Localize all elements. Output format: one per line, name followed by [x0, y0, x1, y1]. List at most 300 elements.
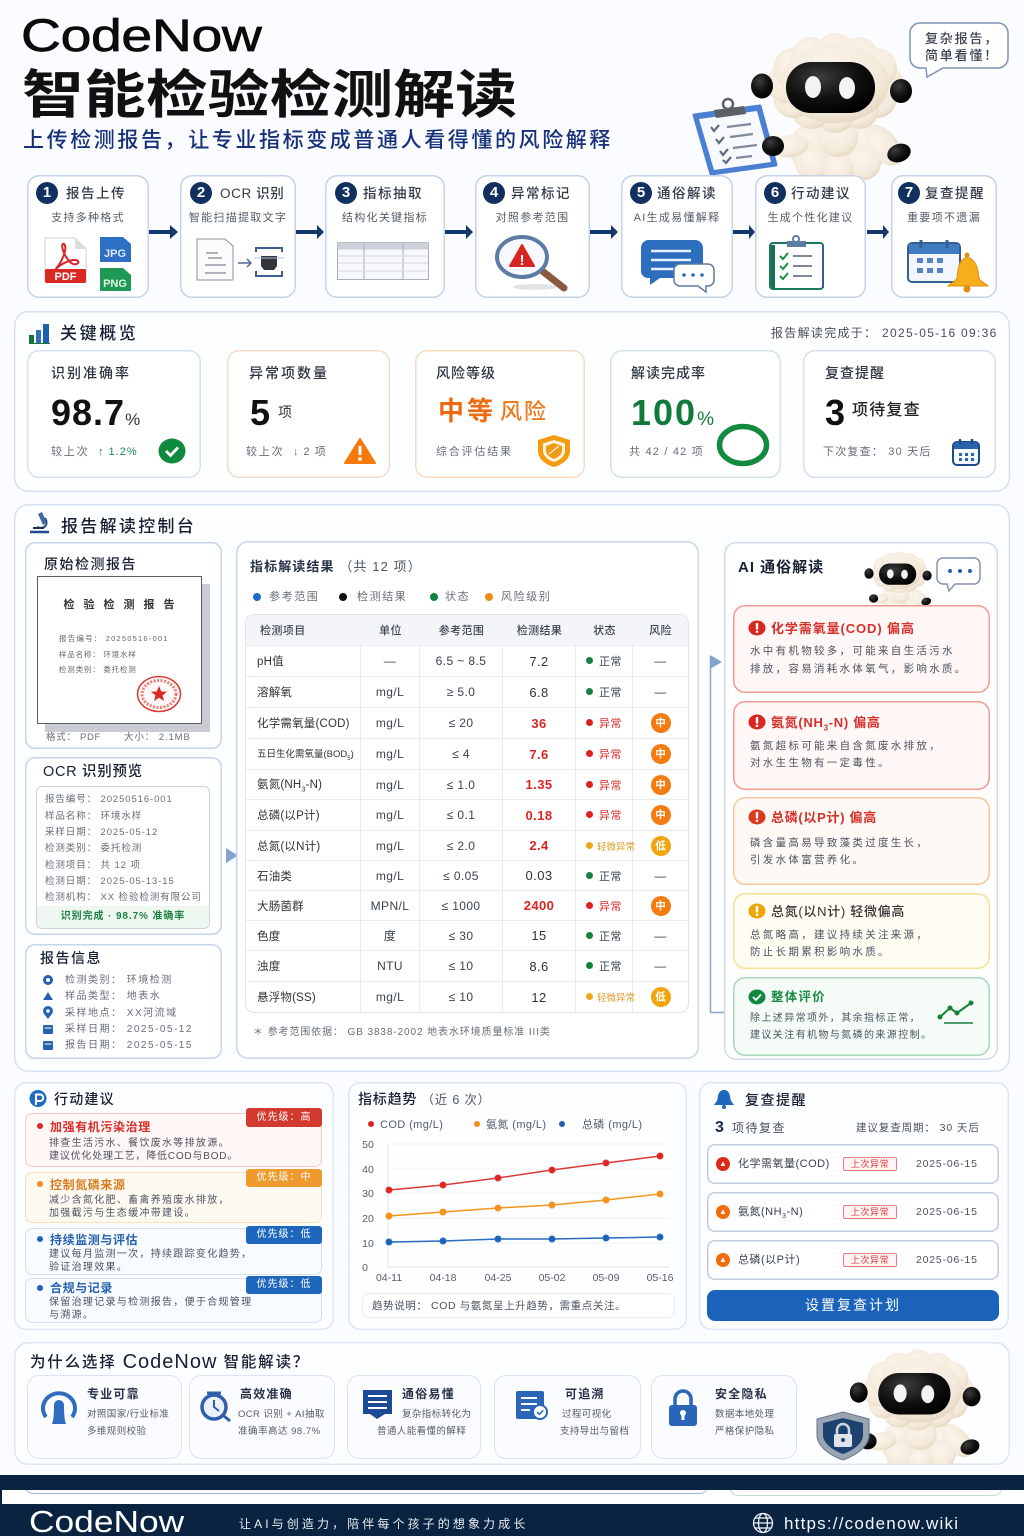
- card: review reminder: [803, 350, 996, 478]
- subtitle: 上传检测报告，让专业指标变成普通人看得懂的风险解释: [23, 129, 613, 152]
- row: phosphorus: 上次异常: [851, 1255, 889, 1265]
- bubble text: 复杂报告，: [925, 31, 999, 46]
- indicator table: 6.5 ~ 8.5: [436, 654, 486, 668]
- step 7: 重要项不遗漏: [907, 212, 981, 224]
- document preview: 样品名称： 环境水样: [59, 650, 137, 659]
- indicator table: 正常: [599, 961, 622, 973]
- action: monitoring: [25, 1228, 322, 1275]
- action: organic pollution: [25, 1113, 322, 1167]
- icon: file formats: [44, 237, 131, 291]
- website: https://codenow.wiki: [784, 1514, 959, 1533]
- indicator table: 7.6: [529, 746, 549, 762]
- callout: COD: 水中有机物较多，可能来自生活污水: [750, 645, 955, 657]
- priority tag: 优先级：低: [256, 1279, 312, 1290]
- feature: reliable: 多维规则校验: [87, 1426, 146, 1437]
- indicator table: 异常: [599, 749, 622, 761]
- step 6: 行动建议: [791, 186, 851, 201]
- feature: reliable: 对照国家/行业标准: [87, 1409, 169, 1420]
- row: ammonia: ▲: [719, 1207, 727, 1216]
- indicator table: [246, 615, 688, 1012]
- feature: plain language: 复杂指标转化为: [402, 1409, 471, 1420]
- footer logo: CodeNow: [29, 1504, 184, 1539]
- line chart: 05-09: [593, 1272, 620, 1284]
- action: compliance: 与溯源。: [49, 1310, 94, 1321]
- icon: file formats: PNG: [103, 278, 127, 290]
- mascot: small: [864, 552, 932, 605]
- card: accuracy: 较上次: [51, 446, 89, 458]
- review cycle: 建议复查周期： 30 天后: [856, 1122, 980, 1134]
- indicator table: ≤ 30: [449, 928, 473, 942]
- step 1: 1: [43, 184, 51, 201]
- heading: 指标趋势 （近 6 次）: [358, 1091, 491, 1107]
- card: review reminder: 3: [825, 392, 846, 433]
- callout: ammonia: 对水生生物有一定毒性。: [750, 757, 891, 769]
- indicator table: 中: [655, 778, 666, 790]
- feature: plain language: 普通人能看懂的解释: [377, 1426, 466, 1437]
- arrow: report to results: [226, 848, 236, 863]
- heading: 关键概览: [60, 324, 138, 343]
- indicator table: 0.18: [526, 808, 552, 822]
- action: compliance: [25, 1278, 322, 1323]
- chart legend: [368, 1117, 642, 1131]
- priority tag: [246, 1226, 322, 1244]
- title: 智能检验检测解读: [22, 67, 517, 125]
- callout: phosphorus: 引发水体富营养化。: [750, 854, 865, 866]
- step 7: [891, 175, 997, 298]
- icon: padlock: [667, 1389, 699, 1429]
- icon: alert: [748, 904, 766, 918]
- OCR text box: 报告编号： 20250516-001: [45, 794, 173, 805]
- card: report info: [25, 944, 222, 1059]
- step 6: 6: [771, 184, 779, 201]
- feature: reliable: [27, 1375, 182, 1459]
- progress ring: [716, 424, 770, 466]
- indicator table: MPN/L: [371, 898, 409, 912]
- feature: traceable: 可追溯: [565, 1387, 605, 1401]
- callout: nitrogen: [733, 893, 990, 969]
- icon: shield: [538, 435, 570, 467]
- icon: bell: [714, 1090, 734, 1109]
- row: phosphorus: 2025-06-15: [916, 1254, 978, 1266]
- step 5: 5: [637, 184, 645, 201]
- priority tag: 优先级：低: [256, 1229, 312, 1240]
- document preview: [37, 576, 202, 724]
- action: nitrogen phosphorus: 加强截污与生态缓冲带建设。: [49, 1208, 196, 1219]
- indicator table: 状态: [593, 625, 616, 637]
- feature: privacy: 数据本地处理: [715, 1409, 774, 1420]
- step 7: 7: [905, 184, 913, 201]
- icon: alert: [748, 620, 766, 636]
- step 5: AI生成易懂解释: [634, 212, 720, 224]
- legend: 参考范围: [269, 591, 319, 603]
- line chart: 30: [362, 1188, 374, 1200]
- indicator table: mg/L: [376, 685, 404, 699]
- feature: plain language: [347, 1375, 481, 1459]
- card title: 指标解读结果 （共 12 项）: [250, 559, 422, 574]
- heading: 为什么选择 CodeNow 智能解读？: [30, 1351, 310, 1373]
- priority tag: [246, 1276, 322, 1294]
- card: review reminder: 下次复查： 30 天后: [823, 446, 932, 458]
- heading: 行动建议: [54, 1091, 115, 1107]
- step 2: 智能扫描提取文字: [189, 212, 287, 224]
- icon: warning triangle: [344, 438, 376, 464]
- indicator table: 正常: [599, 687, 622, 699]
- icon: checklist clipboard: [769, 235, 824, 290]
- card: accuracy: ↑ 1.2%: [98, 446, 138, 458]
- step 1: 支持多种格式: [51, 212, 125, 224]
- indicator table: 0.03: [526, 868, 552, 883]
- callout: ammonia: 氨氮(NH3-N) 偏高: [771, 715, 881, 733]
- card: completion: 解读完成率: [631, 365, 706, 381]
- indicator table: 中: [655, 809, 666, 821]
- indicator table: 1.35: [526, 777, 552, 792]
- callout: phosphorus: [733, 797, 990, 885]
- card: anomalies: 异常项数量: [249, 365, 329, 381]
- indicator table: mg/L: [376, 990, 404, 1004]
- indicator table: 2400: [524, 898, 554, 913]
- row: COD: 上次异常: [851, 1159, 889, 1169]
- feature: traceable: 过程可视化: [562, 1409, 612, 1420]
- callout: COD: 化学需氧量(COD) 偏高: [771, 621, 915, 636]
- indicator table: 石油类: [257, 870, 292, 882]
- step 6: [755, 175, 866, 298]
- indicator table: ≤ 1.0: [447, 778, 475, 792]
- indicator table: 悬浮物(SS): [257, 992, 316, 1004]
- callout: overall: [733, 977, 990, 1056]
- line chart: 04-18: [430, 1272, 457, 1284]
- action: compliance: 合规与记录: [50, 1281, 113, 1295]
- callout: nitrogen: 总氮(以N计) 轻微偏高: [771, 904, 905, 919]
- card: report info: 采样地点： XX河流域: [65, 1008, 178, 1019]
- icon: chat bubbles: [641, 240, 715, 294]
- card: risk level: 风险: [500, 399, 548, 424]
- row: ammonia: 2025-06-15: [916, 1206, 978, 1218]
- series: phosphorus: [386, 1234, 663, 1245]
- icon: document lines: [361, 1389, 395, 1423]
- chart legend: 氨氮 (mg/L): [486, 1117, 546, 1131]
- indicator table: 中: [655, 900, 666, 912]
- feature: plain language: 通俗易懂: [402, 1387, 455, 1401]
- info icons: [43, 975, 53, 1050]
- priority tag: 优先级：中: [256, 1172, 312, 1183]
- action: organic pollution: 建议优化处理工艺，降低COD与BOD。: [49, 1151, 238, 1162]
- step 4: [475, 175, 590, 298]
- heading: 报告解读控制台: [61, 517, 196, 536]
- action: monitoring: 验证治理效果。: [49, 1262, 128, 1273]
- callout: overall: 除上述异常项外，其余指标正常，: [750, 1013, 921, 1024]
- action: monitoring: 持续监测与评估: [50, 1233, 138, 1247]
- feature: efficient: OCR 识别 + AI抽取: [238, 1409, 325, 1420]
- card: anomalies: ↓ 2 项: [293, 446, 327, 458]
- tagline: 让AI与创造力，陪伴每个孩子的想象力成长: [239, 1517, 528, 1531]
- action: organic pollution: 加强有机污染治理: [50, 1120, 151, 1134]
- trend note: [362, 1293, 675, 1318]
- indicator table: 低: [655, 840, 666, 852]
- process steps: [27, 175, 997, 298]
- indicator table: 总氮(以N计): [257, 840, 320, 852]
- indicator table: —: [654, 654, 667, 668]
- icon: magnifier with warning: !: [520, 252, 524, 269]
- card: original report: [25, 542, 222, 749]
- indicator table: 15: [531, 928, 547, 943]
- indicator table: —: [384, 654, 396, 668]
- row: phosphorus: 总磷(以P计): [738, 1254, 800, 1266]
- card: anomalies: [227, 350, 390, 478]
- indicator table: 溶解氧: [257, 687, 292, 699]
- icon: microscope: [30, 512, 49, 534]
- card: risk level: 中等: [438, 396, 496, 426]
- step 7: 复查提醒: [925, 186, 985, 201]
- pending count: 3: [715, 1119, 724, 1136]
- icon: OCR scan: [196, 238, 284, 280]
- speech bubble: [909, 22, 1009, 78]
- indicator table: 色度: [257, 930, 280, 942]
- indicator table: ≤ 10: [449, 959, 473, 973]
- card title: OCR 识别预览: [43, 764, 143, 780]
- line chart: [362, 1117, 674, 1284]
- indicator table: 单位: [379, 625, 402, 637]
- trend note: 趋势说明： COD 与氨氮呈上升趋势，需重点关注。: [372, 1300, 626, 1312]
- step 4: 对照参考范围: [496, 212, 569, 224]
- panel: action recommendations: [14, 1082, 334, 1330]
- indicator table: ≥ 5.0: [447, 685, 475, 699]
- step 3: 指标抽取: [363, 186, 423, 201]
- indicator table: NTU: [377, 959, 403, 973]
- card: anomalies: 5: [250, 392, 271, 433]
- line chart: 0: [362, 1262, 368, 1274]
- card: review reminder: 复查提醒: [825, 365, 885, 381]
- indicator table: mg/L: [376, 868, 404, 882]
- footnote: ＊ 参考范围依据： GB 3838-2002 地表水环境质量标准 III类: [253, 1027, 551, 1038]
- card: accuracy: 识别准确率: [51, 365, 131, 381]
- document preview: 检验检测报告: [64, 599, 184, 611]
- row: ammonia: 氨氮(NH3-N): [738, 1206, 803, 1220]
- icon: check: [748, 990, 766, 1004]
- OCR text box: 检测项目： 共 12 项: [45, 860, 141, 871]
- indicator table: —: [654, 685, 667, 699]
- indicator table: ≤ 20: [449, 716, 473, 730]
- indicator table: 正常: [599, 930, 622, 942]
- button: set review plan: [707, 1290, 999, 1321]
- icon: action badge: [30, 1090, 46, 1107]
- chart legend: 总磷 (mg/L): [582, 1117, 642, 1131]
- row: COD: 2025-06-15: [916, 1158, 978, 1170]
- series: ammonia: [386, 1191, 663, 1219]
- indicator table: ≤ 10: [449, 990, 473, 1004]
- icon: alert: [748, 810, 766, 824]
- card: completion: 100%: [631, 392, 714, 433]
- step 2: 2: [197, 184, 205, 201]
- legend: [253, 590, 551, 603]
- line chart: 50: [362, 1139, 374, 1151]
- OCR status bar: [37, 906, 209, 928]
- OCR text box: 检测类别： 委托检测: [45, 843, 142, 854]
- mascot with shield: [811, 1345, 1009, 1464]
- line chart: 04-25: [485, 1272, 512, 1284]
- card: report info: 样品类型： 地表水: [65, 991, 161, 1002]
- feature: efficient: [189, 1375, 335, 1459]
- icon: security shield: [815, 1411, 871, 1461]
- priority tag: [246, 1169, 322, 1187]
- indicator table: 检测项目: [260, 625, 306, 637]
- step 2: [180, 175, 296, 298]
- indicator table: ≤ 4: [452, 747, 470, 761]
- action: nitrogen phosphorus: [25, 1172, 322, 1223]
- indicator table: 36: [531, 716, 547, 730]
- document preview: 检测类别： 委托检测: [59, 665, 137, 674]
- indicator table: 中: [655, 717, 666, 729]
- file meta: 格式： PDF: [46, 732, 101, 743]
- indicator table: 低: [655, 991, 666, 1003]
- legend: 风险级别: [501, 591, 551, 603]
- step 3: [325, 175, 445, 298]
- action: nitrogen phosphorus: 控制氮磷来源: [50, 1178, 126, 1192]
- heading: 复查提醒: [745, 1092, 807, 1108]
- footer: [0, 1475, 1024, 1536]
- step 4: 异常标记: [511, 186, 571, 201]
- indicator table: 浊度: [257, 961, 280, 973]
- button: set review plan: 设置复查计划: [805, 1297, 901, 1313]
- indicator table: ≤ 0.1: [447, 808, 475, 822]
- icon: arch emblem: [39, 1389, 79, 1427]
- indicator table: 轻微异常: [597, 993, 635, 1004]
- arrow: feedback connector: [710, 655, 724, 1014]
- row: phosphorus: [707, 1240, 999, 1280]
- step 3: 结构化关键指标: [342, 212, 428, 224]
- feature: traceable: 支持导出与留档: [560, 1426, 629, 1437]
- icon: clipboard held by mascot: [692, 98, 778, 175]
- row: phosphorus: ▲: [719, 1255, 727, 1264]
- card: report info: 报告日期： 2025-05-15: [65, 1040, 193, 1051]
- row: COD: ▲: [719, 1159, 727, 1168]
- icon: alert: [748, 714, 766, 730]
- line chart: 40: [362, 1164, 374, 1176]
- icon: document check: [515, 1390, 551, 1422]
- icon: magnifier with warning: [495, 235, 568, 292]
- legend: 状态: [445, 591, 470, 603]
- cut-off page strip: [2, 1490, 1024, 1504]
- callout: nitrogen: 总氮略高，建议持续关注来源，: [750, 929, 929, 941]
- indicator table: 大肠菌群: [257, 900, 304, 912]
- card: review reminder: 项待复查: [852, 402, 921, 419]
- indicator table: 度: [384, 929, 396, 943]
- indicator table: mg/L: [376, 808, 404, 822]
- icon: stopwatch: [199, 1390, 235, 1422]
- panel: review reminders: [699, 1082, 1009, 1330]
- icon: file formats: PDF: [54, 271, 77, 283]
- indicator table: —: [654, 928, 667, 942]
- callout: ammonia: 氨氮超标可能来自含氮废水排放，: [750, 740, 942, 752]
- line chart: 05-16: [647, 1272, 674, 1284]
- card: accuracy: 98.7%: [51, 392, 140, 433]
- bubble text: 简单看懂！: [925, 48, 999, 62]
- step 5: [621, 175, 733, 298]
- step 3: 3: [342, 184, 350, 201]
- indicator table: 异常: [599, 780, 622, 792]
- callout: COD: 排放，容易消耗水体氧气，影响水质。: [750, 663, 968, 675]
- icon: check: [158, 438, 186, 464]
- indicator table: 总磷(以P计): [257, 810, 320, 822]
- panel: report console: [14, 504, 1010, 1072]
- indicator table: 12: [531, 990, 547, 1004]
- row: COD: [707, 1144, 999, 1184]
- indicator table: ≤ 0.05: [443, 868, 479, 882]
- panel: review reminders: 项待复查: [732, 1121, 786, 1135]
- callout: overall: 整体评价: [771, 990, 826, 1004]
- step 6: 生成个性化建议: [767, 212, 854, 224]
- indicator table: 7.2: [529, 654, 549, 668]
- icon: file formats: JPG: [104, 248, 126, 260]
- report timestamp: 报告解读完成于： 2025-05-16 09:36: [771, 326, 998, 340]
- card: original report: 大小： 2.1MB: [124, 732, 191, 743]
- arrows between steps: [149, 225, 889, 239]
- line chart: 10: [362, 1238, 374, 1250]
- panel: why choose: [14, 1342, 1010, 1465]
- row: ammonia: [707, 1192, 999, 1232]
- indicator table: 中: [655, 748, 666, 760]
- feature: traceable: [494, 1375, 641, 1459]
- card: accuracy: [27, 350, 201, 478]
- indicator table: —: [654, 868, 667, 882]
- speech bubble with dots: [936, 557, 981, 592]
- step 1: [27, 175, 149, 298]
- indicator table: 2.4: [529, 838, 549, 853]
- card: anomalies: 项: [278, 404, 292, 420]
- indicator table: mg/L: [376, 716, 404, 730]
- panel: key overview: [14, 311, 1010, 492]
- callout: ammonia: [733, 701, 990, 790]
- row: COD: 化学需氧量(COD): [738, 1158, 830, 1170]
- feature: reliable: 专业可靠: [87, 1387, 140, 1401]
- indicator table: pH值: [257, 656, 284, 668]
- card: report info: 采样日期： 2025-05-12: [65, 1024, 193, 1035]
- indicator table: 风险: [649, 625, 672, 637]
- feature: privacy: 安全隐私: [715, 1387, 768, 1401]
- step 5: 通俗解读: [657, 186, 717, 201]
- OCR text box: [36, 786, 210, 929]
- OCR text box: 采样日期： 2025-05-12: [45, 827, 158, 838]
- card: OCR preview: [25, 757, 222, 935]
- indicator table: 五日生化需氧量(BOD5): [257, 749, 354, 762]
- legend: 检测结果: [357, 591, 407, 603]
- OCR status bar: 识别完成 · 98.7% 准确率: [61, 911, 185, 922]
- OCR text box: 样品名称： 环境水样: [45, 811, 142, 822]
- action: monitoring: 建议每月监测一次，持续跟踪变化趋势，: [49, 1249, 252, 1260]
- line chart: 04-11: [376, 1272, 402, 1284]
- feature: privacy: [651, 1375, 797, 1459]
- indicator table: 正常: [599, 870, 622, 882]
- mascot: sheep robot: [751, 33, 912, 180]
- OCR text box: 检测机构： XX 检验检测有限公司: [45, 892, 202, 903]
- indicator table: 轻微异常: [597, 842, 635, 852]
- indicator table: —: [654, 959, 667, 973]
- icon: calendar and bell: [907, 240, 989, 292]
- indicator table: 参考范围: [439, 625, 484, 637]
- indicator table: 正常: [599, 656, 622, 668]
- indicator table: 6.8: [529, 684, 549, 700]
- series: COD: [386, 1153, 663, 1193]
- feature: efficient: 准确率高达 98.7%: [238, 1426, 321, 1437]
- feature: efficient: 高效准确: [240, 1387, 293, 1401]
- icon: globe: [752, 1512, 774, 1534]
- indicator table: ≤ 2.0: [447, 838, 475, 852]
- indicator table: 化学需氧量(COD): [257, 718, 350, 730]
- icon: data table: [337, 242, 429, 280]
- info rows: 检测类别： 环境检测: [65, 975, 173, 986]
- line chart: 20: [362, 1213, 374, 1225]
- icon: bar chart: [29, 324, 50, 344]
- card: risk level: [415, 350, 585, 478]
